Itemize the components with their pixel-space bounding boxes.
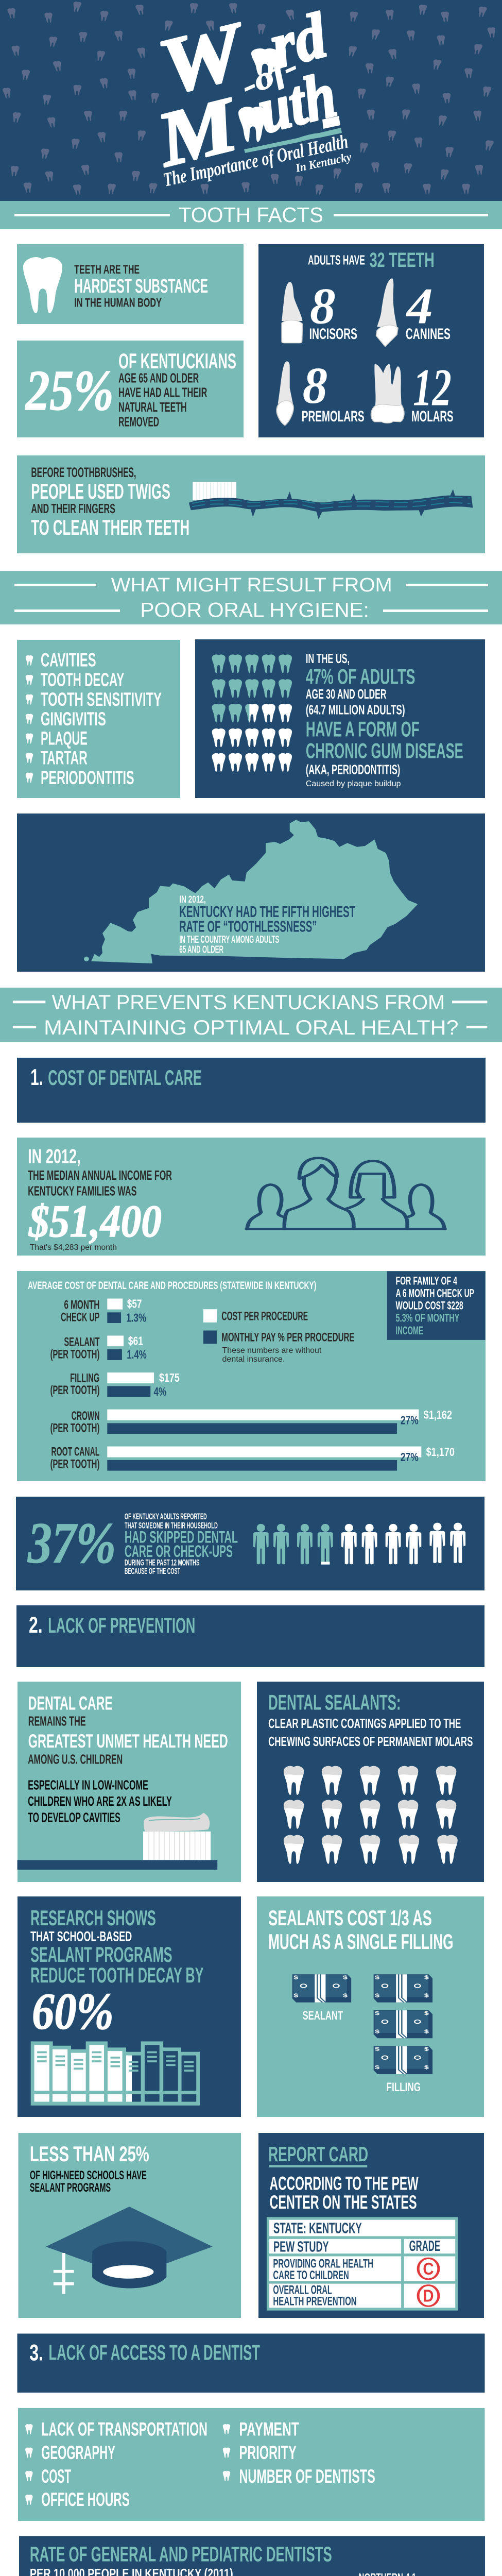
- icon: twig toothbrush: [189, 482, 473, 519]
- text: skipped dental care: BECAUSE OF THE COST: [125, 1566, 180, 1576]
- stat: 8 incisors: 8: [310, 278, 336, 334]
- pictogram: sealed teeth: [284, 1766, 458, 1864]
- panel: adults have 32 teeth: PREMOLARS: [302, 408, 365, 425]
- list text: TARTAR: [41, 747, 88, 769]
- icon: molar: [371, 364, 404, 423]
- subtitle: In Kentucky: [294, 150, 353, 175]
- text: dental sealants definition: [268, 1690, 473, 1749]
- panel: research shows: SEALANT PROGRAMS: [30, 1943, 172, 1967]
- list text: PAYMENT: [239, 2418, 299, 2439]
- legend: COST PER PROCEDURE: [221, 1309, 308, 1324]
- panel: 37 percent skipped care: HAD SKIPPED DENTAL: [125, 1528, 238, 1547]
- list text: [41, 649, 162, 788]
- bars: sealant: [50, 1334, 147, 1361]
- bars: sealant: $61: [128, 1334, 143, 1348]
- stat: 37%: 37%: [27, 1511, 116, 1575]
- panel: median annual income: THE MEDIAN ANNUAL INCOME FOR: [28, 1168, 172, 1183]
- text: teeth are the hardest substance: [74, 263, 208, 310]
- list text: LACK OF TRANSPORTATION: [41, 2418, 207, 2439]
- list text: TOOTH DECAY: [41, 669, 124, 690]
- text: greatest unmet health need: AMONG U.S. CHILDREN: [28, 1752, 123, 1767]
- infographic canvas: HARDEST SUBSTANCE: [74, 275, 208, 297]
- stat: $51,400: $51,400: [28, 1196, 162, 1246]
- bars: filling: (PER TOOTH): [50, 1383, 99, 1397]
- section band: tooth facts: [0, 201, 502, 229]
- heading: report card: [268, 2142, 419, 2213]
- grade stamp: D: D: [423, 2286, 434, 2306]
- bars: root canal: 27%: [401, 1450, 419, 1464]
- panel: 1. cost of dental care: 1.: [30, 1064, 43, 1090]
- bars: filling: [50, 1371, 180, 1398]
- text: skipped dental care: DURING THE PAST 12 MONTHS: [125, 1557, 199, 1567]
- text: research statement: [30, 1906, 203, 1988]
- subtitle: The Importance of Oral Health: [161, 131, 350, 191]
- panel: average cost of dental procedures: [17, 1271, 486, 1481]
- infographic canvas: TOOTH SENSITIVITY: [41, 689, 162, 710]
- table: Kentucky grades: [267, 2217, 458, 2311]
- text: teeth are the hardest substance: TEETH ARE THE: [74, 263, 140, 277]
- panel: list of conditions: [17, 640, 180, 798]
- panel: access barriers list: [18, 2408, 485, 2521]
- panel: average cost of dental procedures: 1.3%: [126, 1311, 146, 1324]
- panel: 47 percent of adults: [195, 639, 485, 798]
- pictogram: ten people: [253, 1523, 465, 1565]
- panel: research shows: [18, 1896, 241, 2117]
- panel: 3. lack of access to a dentist: 3.: [29, 2340, 43, 2365]
- text: fifth highest rate of toothlessness: IN THE COUNTRY AMONG ADULTS: [179, 934, 279, 945]
- text: greatest unmet health need: CHILDREN WHO ARE 2X AS LIKELY: [28, 1794, 172, 1809]
- text: gum disease statistic: Caused by plaque buildup: [306, 778, 401, 788]
- table: Kentucky grades: CARE TO CHILDREN: [273, 2268, 349, 2282]
- section band: tooth facts: TOOTH FACTS: [179, 203, 323, 227]
- text: people used twigs: AND THEIR FINGERS: [31, 502, 115, 516]
- section band: what prevents Kentuckians: [0, 988, 502, 1042]
- bars: root canal: [50, 1445, 455, 1471]
- note: per month: That's $4,283 per month: [30, 1242, 117, 1252]
- text: greatest unmet health need: [28, 1692, 228, 1825]
- icon: sealant money stack: $$$$: [293, 1975, 348, 1998]
- icon: filling money stacks: $$$$: [375, 1975, 429, 1998]
- list text: PERIODONTITIS: [41, 767, 134, 788]
- grade stamp: D: [418, 2285, 439, 2306]
- bullet icons: teeth: [26, 655, 33, 783]
- pictogram: 25 teeth, 47 percent filled: [212, 654, 292, 772]
- icon: incisor: [282, 282, 303, 343]
- panel: sealants cost one third: SEALANT: [303, 2008, 343, 2023]
- bars: crown: (PER TOOTH): [50, 1421, 99, 1435]
- title: Word of Mouth: [148, 0, 343, 183]
- heading: adults have 32 teeth: ADULTS HAVE: [308, 253, 365, 267]
- panel: dental sealants: [257, 1682, 484, 1882]
- panel: before toothbrushes: TO CLEAN THEIR TEETH: [31, 516, 189, 540]
- icon: filling money stacks: [374, 1974, 432, 2074]
- panel: average cost of dental procedures: $175: [159, 1371, 180, 1384]
- panel: dental care unmet need: [18, 1682, 241, 1882]
- list text: OFFICE HOURS: [41, 2489, 130, 2510]
- text: of Kentuckians: NATURAL TEETH: [118, 400, 187, 415]
- icon: toothbrush with toothpaste: [18, 1812, 217, 1870]
- text: of Kentuckians: AGE 65 AND OLDER: [118, 371, 199, 385]
- section band: what might result from poor oral hygiene: [0, 571, 502, 624]
- icon: canine: [376, 278, 398, 347]
- bars: crown: [50, 1408, 452, 1435]
- panel: 37 percent skipped care: OF KENTUCKY ADULTS REPORTED: [125, 1512, 207, 1521]
- text: greatest unmet health need: DENTAL CARE: [28, 1692, 113, 1714]
- grade stamp: C: C: [423, 2259, 434, 2278]
- text: median income: KENTUCKY FAMILIES WAS: [28, 1184, 137, 1198]
- panel: 3. lack of access to a dentist: [18, 2334, 485, 2393]
- text: greatest unmet health need: REMAINS THE: [28, 1715, 86, 1729]
- bars: sealant: SEALANT: [64, 1335, 99, 1349]
- icon: filling money stacks: $$$$: [375, 2010, 429, 2035]
- bars: filling: FILLING: [70, 1371, 99, 1385]
- panel: adults have 32 teeth: INCISORS: [309, 325, 357, 343]
- icon: filling money stacks: $$$$: [375, 2046, 429, 2070]
- text: people used twigs: BEFORE TOOTHBRUSHES,: [31, 465, 136, 480]
- list text: CAVITIES: [41, 649, 96, 671]
- text: research statement: THAT SCHOOL-BASED: [30, 1928, 132, 1944]
- list text: PRIORITY: [239, 2442, 297, 2463]
- panel: 25 percent of Kentuckians: [17, 341, 244, 437]
- bars: root canal: (PER TOOTH): [50, 1457, 99, 1471]
- bullet icons: teeth: [25, 2424, 230, 2505]
- stat: 60%: 60%: [32, 1983, 114, 2040]
- text: fifth highest rate of toothlessness: [179, 894, 355, 955]
- icon: row of books, 60 percent filled: [31, 2041, 200, 2106]
- text: median income: IN 2012,: [28, 1145, 81, 1167]
- bars: crown: 27%: [401, 1413, 419, 1427]
- text: skipped dental care: [125, 1512, 238, 1576]
- bars: 6 month check up: 6 MONTH: [64, 1298, 99, 1312]
- text: people used twigs: [31, 465, 189, 540]
- icon: toothbrush under title: [244, 116, 342, 153]
- panel: adults have 32 teeth: [258, 244, 484, 437]
- text: high-need schools: [30, 2142, 149, 2195]
- panel: 2. lack of prevention: [16, 1605, 484, 1667]
- panel: less than 25 percent: OF HIGH-NEED SCHOOLS HAVE: [30, 2168, 147, 2182]
- stat: 12 molars: [411, 359, 453, 425]
- subtitle: [161, 131, 353, 191]
- panel: less than 25 percent: LESS THAN 25%: [30, 2142, 149, 2166]
- infographic canvas: OF KENTUCKIANS: [118, 349, 236, 373]
- legend: [203, 1309, 354, 1364]
- bars: root canal: ROOT CANAL: [51, 1445, 99, 1459]
- panel: before toothbrushes: [17, 455, 485, 553]
- icon: large tooth: [23, 257, 62, 313]
- panel: less than 25 percent: [19, 2133, 241, 2318]
- stat: 8 premolars: [302, 357, 365, 425]
- panel: sealants cost one third: [257, 1896, 484, 2117]
- title: Word of Mouth: rd: [263, 0, 334, 82]
- infographic canvas: REDUCE TOOTH DECAY BY: [30, 1963, 203, 1988]
- text: of Kentuckians: [118, 349, 236, 429]
- table: Kentucky grades: GRADE: [409, 2238, 440, 2255]
- list text: PLAQUE: [41, 727, 88, 749]
- stat: 4 canines: 4: [405, 278, 433, 334]
- grade stamp: C: [418, 2258, 439, 2279]
- text: greatest unmet health need: TO DEVELOP CAVITIES: [28, 1810, 120, 1825]
- legend: These numbers are without: [222, 1345, 321, 1355]
- callout: family of 4: [387, 1271, 486, 1340]
- panel: average cost of dental procedures: $1,170: [426, 1445, 455, 1459]
- icon: graduation cap: [46, 2207, 213, 2294]
- panel: 37 percent skipped care: CARE OR CHECK-UPS: [125, 1543, 233, 1561]
- header panel: [0, 0, 502, 201]
- panel: rate of dentists: [19, 2536, 485, 2576]
- panel: sealants cost one third: FILLING: [387, 2080, 421, 2094]
- panel: average cost of dental procedures: 1.4%: [127, 1348, 147, 1361]
- text: high-need schools: SEALANT PROGRAMS: [30, 2180, 111, 2195]
- table: Kentucky grades: STATE: KENTUCKY: [273, 2220, 362, 2236]
- text: research statement: RESEARCH SHOWS: [30, 1906, 156, 1930]
- icon: premolar: [276, 361, 293, 426]
- legend: dental insurance.: [222, 1354, 285, 1364]
- panel: average cost of dental procedures: $1,162: [424, 1408, 452, 1421]
- title: Word of Mouth: -of-: [236, 48, 303, 103]
- table: Kentucky grades: HEALTH PREVENTION: [273, 2294, 357, 2309]
- text: fifth highest rate of toothlessness: 65 AND OLDER: [179, 944, 223, 955]
- map: Kentucky: [84, 820, 418, 963]
- title: Word of Mouth: M: [148, 80, 248, 183]
- list text: COST: [41, 2466, 71, 2487]
- heading: adults have 32 teeth: [308, 249, 435, 272]
- section band: what might result from poor oral hygiene: POOR ORAL HYGIENE:: [140, 599, 369, 622]
- text: fifth highest rate of toothlessness: IN 2012,: [179, 894, 206, 905]
- bars: 6 month check up: [61, 1297, 146, 1324]
- panel: 1. cost of dental care: [17, 1058, 486, 1123]
- bars: 6 month check up: CHECK UP: [61, 1310, 99, 1324]
- icon: family outline: [247, 1158, 445, 1229]
- panel: hardest substance: [17, 244, 244, 324]
- text: gum disease statistic: [306, 652, 463, 788]
- tooth pattern background: [3, 2, 496, 195]
- stat: 25%: 25%: [25, 359, 114, 422]
- list text: GINGIVITIS: [41, 708, 106, 730]
- table: Kentucky grades: PEW STUDY: [273, 2238, 329, 2255]
- panel: 1. cost of dental care: COST OF DENTAL CARE: [48, 1066, 202, 1090]
- heading: sealants cost 1/3: [268, 1906, 453, 1954]
- title: Word of Mouth: uth: [251, 59, 343, 147]
- text: distribution of dentists: [29, 2542, 332, 2576]
- text: gum disease statistic: IN THE US,: [306, 652, 350, 666]
- bars: filling: 4%: [153, 1385, 166, 1398]
- callout: family of 4: INCOME: [396, 1325, 423, 1337]
- bars: 6 month check up: $57: [127, 1297, 142, 1311]
- text: greatest unmet health need: ESPECIALLY IN LOW-INCOME: [28, 1778, 148, 1793]
- stat: 8 premolars: 8: [303, 357, 327, 414]
- panel: adults have 32 teeth: 12: [413, 359, 452, 417]
- panel: 37 percent skipped care: [16, 1497, 484, 1590]
- text: of Kentuckians: HAVE HAD ALL THEIR: [118, 385, 207, 400]
- panel: Kentucky toothlessness: [17, 814, 485, 972]
- panel: before toothbrushes: PEOPLE USED TWIGS: [31, 480, 170, 504]
- bars: sealant: (PER TOOTH): [50, 1347, 99, 1361]
- list text: [41, 2418, 375, 2510]
- table: Kentucky grades: OVERALL ORAL: [273, 2283, 332, 2297]
- title: Word of Mouth: W: [150, 5, 257, 112]
- list text: GEOGRAPHY: [41, 2442, 115, 2463]
- panel: median annual income: [17, 1138, 486, 1256]
- text: median income: [28, 1145, 172, 1198]
- panel: 2. lack of prevention: LACK OF PREVENTION: [48, 1614, 195, 1638]
- text: of Kentuckians: REMOVED: [118, 415, 159, 429]
- bars: crown: CROWN: [72, 1409, 99, 1423]
- panel: 2. lack of prevention: 2.: [29, 1612, 43, 1638]
- text: teeth are the hardest substance: IN THE HUMAN BODY: [74, 296, 162, 310]
- panel: report card: [258, 2133, 484, 2318]
- panel: 37 percent skipped care: THAT SOMEONE IN THEIR HOUSEHOLD: [125, 1520, 218, 1530]
